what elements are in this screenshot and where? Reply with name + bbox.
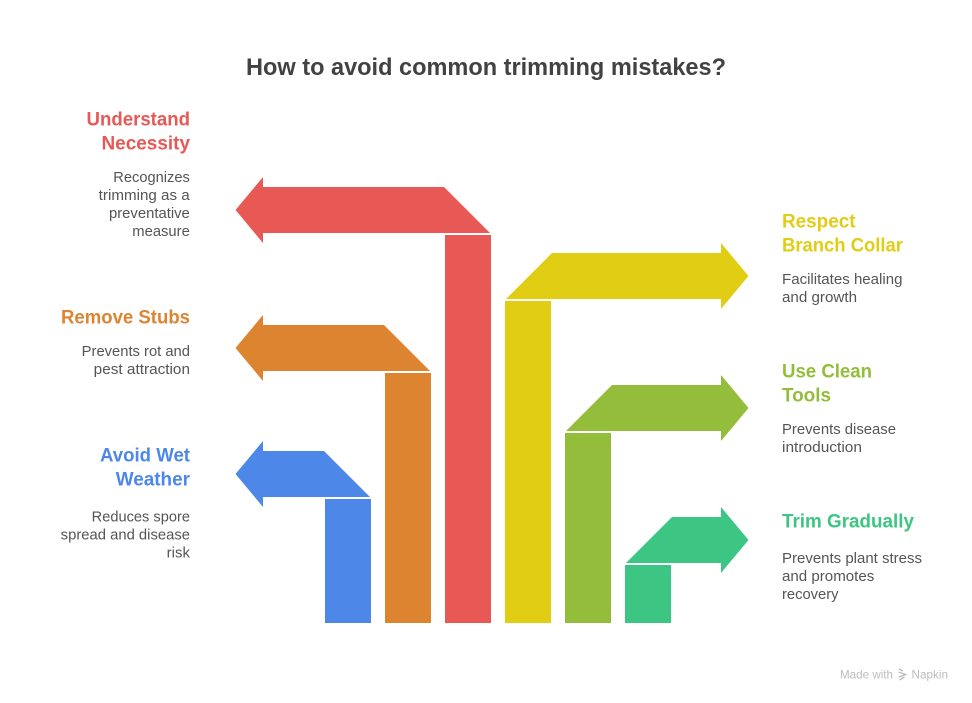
text block: trim gradually: Prevents plant stress: [782, 551, 922, 567]
text block: avoid wet weather: [61, 510, 191, 562]
text block: use clean tools: [782, 422, 896, 456]
arrow: use clean tools (green): [565, 375, 748, 623]
text block: understand necessity: preventative: [109, 206, 190, 222]
watermark: made with napkin: Napkin: [912, 668, 948, 682]
heading: understand necessity: [86, 109, 190, 154]
icon: napkin logo: [898, 669, 906, 680]
text block: trim gradually: [782, 551, 922, 603]
arrow: trim gradually (teal): [625, 507, 748, 623]
text block: understand necessity: [99, 170, 191, 240]
text block: trim gradually: recovery: [782, 587, 839, 603]
panel: avoid wet weather text: [61, 445, 191, 562]
heading: understand necessity: Necessity: [102, 133, 190, 154]
text block: remove stubs: pest attraction: [94, 362, 190, 378]
text block: understand necessity: Recognizes: [113, 170, 190, 186]
arrow: avoid wet weather (blue): [236, 441, 371, 623]
arrow: understand necessity (red): [236, 177, 491, 623]
watermark: made with napkin: [840, 668, 948, 682]
text block: remove stubs: Prevents rot and: [82, 344, 190, 360]
heading: respect branch collar: Branch Collar: [782, 235, 904, 256]
text block: remove stubs: [82, 344, 190, 378]
text block: understand necessity: trimming as a: [99, 188, 191, 204]
text block: use clean tools: Prevents disease: [782, 422, 896, 438]
arrow: remove stubs (orange): [236, 315, 431, 623]
text block: use clean tools: introduction: [782, 440, 862, 456]
arrow: respect branch collar (yellow): [505, 243, 748, 623]
text block: respect branch collar: [782, 272, 902, 306]
text block: respect branch collar: Facilitates healing: [782, 272, 902, 288]
heading: trim gradually: Trim Gradually: [782, 511, 914, 532]
heading: use clean tools: [782, 361, 872, 406]
text block: respect branch collar: and growth: [782, 290, 857, 306]
heading: respect branch collar: Respect: [782, 211, 856, 232]
heading: understand necessity: Understand: [86, 109, 190, 130]
watermark: made with napkin: Made with: [840, 668, 893, 682]
heading: avoid wet weather: [100, 445, 191, 490]
heading: respect branch collar: [782, 211, 904, 256]
text block: avoid wet weather: Reduces spore: [92, 510, 190, 526]
heading: use clean tools: Tools: [782, 385, 831, 406]
panel: understand necessity text: [86, 109, 191, 240]
panel: trim gradually text: [782, 511, 922, 603]
text block: understand necessity: measure: [132, 224, 190, 240]
panel: remove stubs text: [61, 307, 190, 378]
text block: avoid wet weather: spread and disease: [61, 528, 190, 544]
heading: use clean tools: Use Clean: [782, 361, 872, 382]
panel: use clean tools text: [782, 361, 896, 456]
heading: avoid wet weather: Avoid Wet: [100, 445, 191, 466]
panel: respect branch collar text: [782, 211, 904, 306]
text block: avoid wet weather: risk: [167, 546, 191, 562]
title: How to avoid common trimming mistakes?: [246, 54, 726, 81]
heading: remove stubs: Remove Stubs: [61, 307, 190, 328]
heading: avoid wet weather: Weather: [116, 469, 191, 490]
text block: trim gradually: and promotes: [782, 569, 874, 585]
